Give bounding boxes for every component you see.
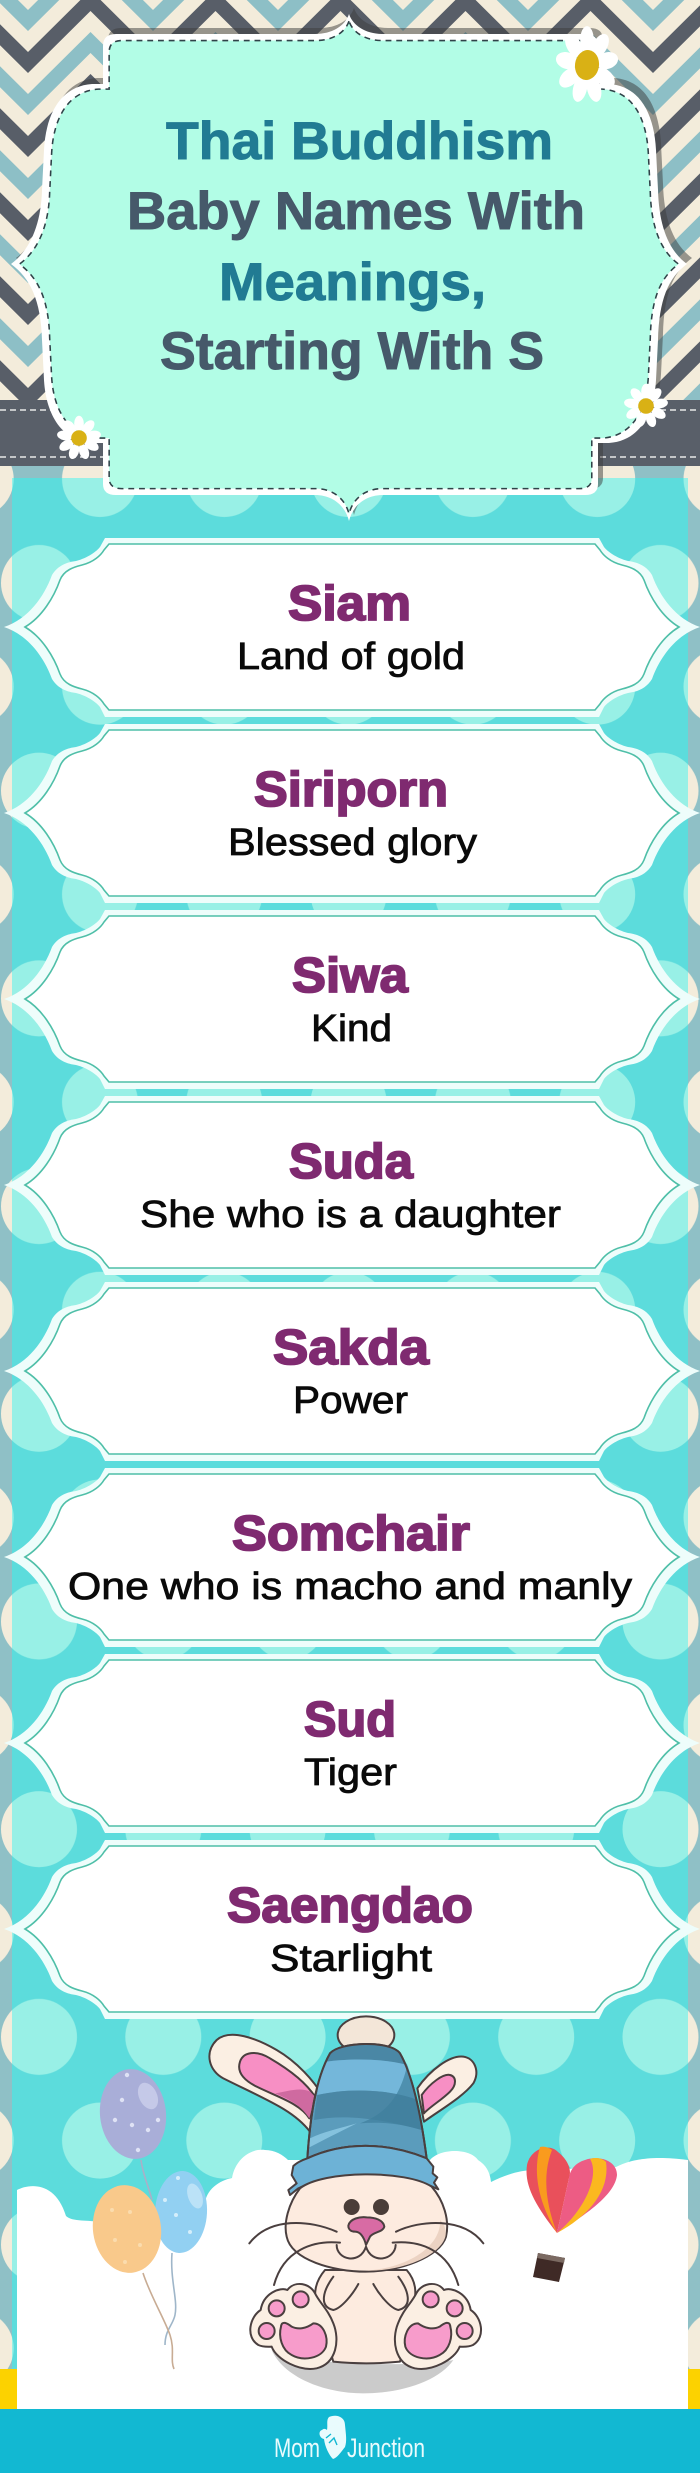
card: Somchair: Somchair: [232, 1507, 470, 1561]
card: Siwa: Kind: [311, 1008, 392, 1050]
title: Thai Buddhism: [166, 112, 553, 171]
card: Sakda: [4, 1282, 700, 1461]
card: Suda: [4, 1096, 700, 1275]
card: Saengdao: Starlight: [270, 1938, 433, 1980]
card: Sud: Tiger: [304, 1752, 397, 1794]
right foot: [395, 2284, 481, 2369]
card: Siwa: Siwa: [292, 949, 409, 1003]
icon: small daisy right: [623, 384, 669, 429]
logo: MomJunction: [274, 2416, 425, 2463]
right ear: [417, 2057, 476, 2122]
card: Sud: Sud: [304, 1693, 396, 1747]
card: Saengdao: [4, 1840, 700, 2019]
body: [315, 2270, 415, 2363]
arms: [324, 2277, 408, 2310]
card: Suda: She who is a daughter: [140, 1194, 561, 1236]
left foot: [250, 2284, 336, 2369]
icon: large daisy top right: [555, 26, 619, 104]
card: Siriporn: [4, 724, 700, 903]
card: Siam: [4, 538, 700, 717]
head: [249, 2174, 483, 2285]
card: Sakda: Sakda: [273, 1321, 430, 1375]
footer bar: [0, 2409, 700, 2473]
card: Siwa: [4, 910, 700, 1089]
card: Somchair: One who is macho and manly: [68, 1566, 632, 1608]
left ear: [209, 2035, 323, 2132]
title: [127, 112, 585, 381]
yellow corner blocks: [0, 2369, 700, 2409]
card: Somchair: [4, 1468, 700, 1647]
icon: balloons: [87, 2066, 209, 2369]
card: Siriporn: Siriporn: [254, 763, 448, 817]
background: polka-dot side strip: [0, 466, 700, 2409]
pom-pom: [338, 2016, 394, 2054]
hat: [288, 2044, 438, 2195]
icon: bunny wearing a striped hat: [209, 2016, 483, 2393]
card: Saengdao: Saengdao: [227, 1879, 473, 1933]
icon: small daisy bottom left: [56, 416, 102, 461]
card: Siam: Siam: [288, 577, 411, 631]
title: Baby Names With: [127, 182, 585, 241]
white cloud ground: [17, 2150, 688, 2409]
card: Sakda: Power: [293, 1380, 408, 1422]
logo: MomJunction: Mom: [274, 2433, 320, 2463]
background: teal polka-dot panel: [12, 478, 688, 2409]
card: Suda: Suda: [289, 1135, 414, 1189]
card: Sud: [4, 1654, 700, 1833]
dark stitched ribbon band: [0, 400, 700, 466]
logo: MomJunction: Junction: [347, 2433, 425, 2463]
icon: heart hot-air balloon: [527, 2147, 617, 2282]
panel: title plaque: [11, 8, 692, 521]
title: Meanings,: [219, 253, 486, 312]
card: Siam: Land of gold: [237, 636, 465, 678]
title: Starting With S: [160, 322, 544, 381]
card: Siriporn: Blessed glory: [228, 822, 477, 864]
background: chevron pattern: [0, 0, 700, 400]
